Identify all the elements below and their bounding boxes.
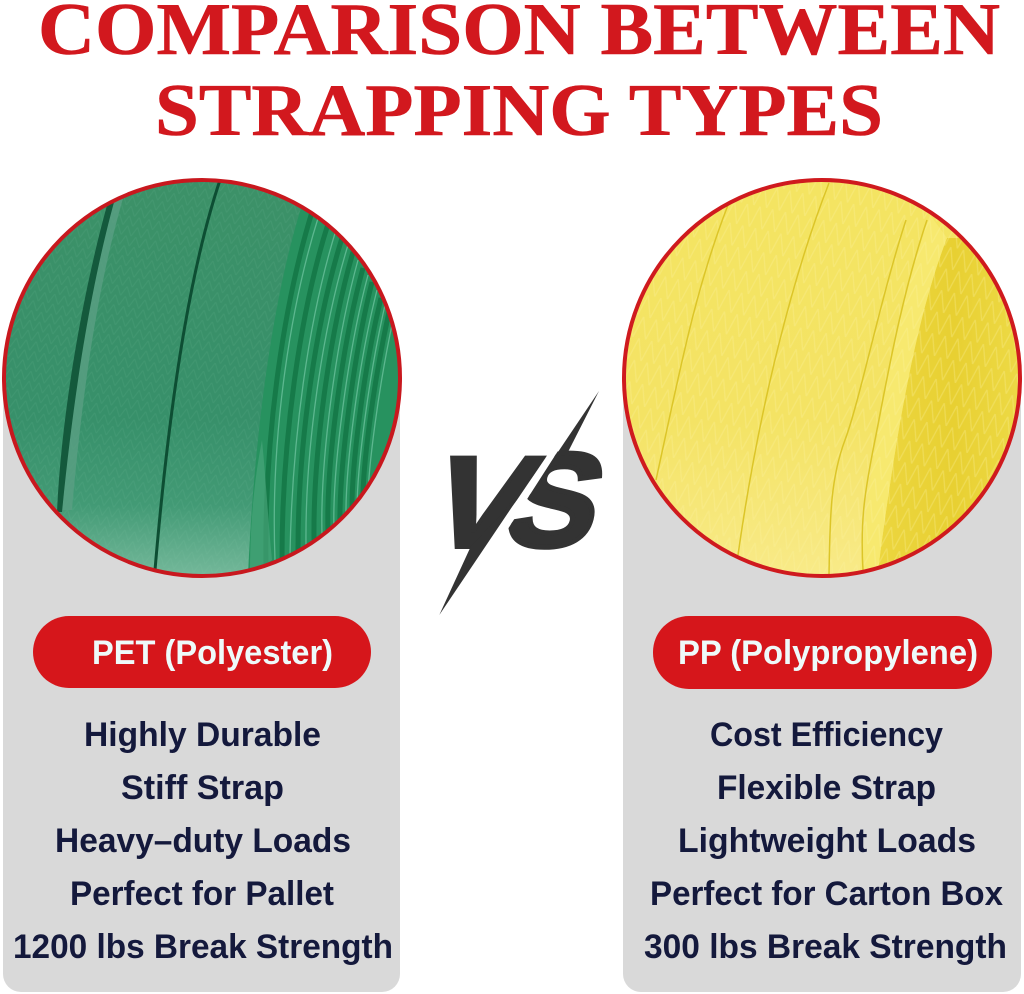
S half with upper spike (508, 391, 602, 550)
feature list: PP: Perfect for Carton Box (650, 875, 1003, 913)
panel background: PET (3, 380, 400, 992)
feature list: PP (644, 716, 1007, 966)
feature list: PET (13, 716, 393, 966)
feature list: PP: Cost Efficiency (710, 716, 943, 754)
label pill: PET (Polyester) (33, 616, 371, 688)
feature list: PET: Stiff Strap (121, 769, 284, 807)
panel: PP (623, 180, 1024, 992)
S half with upper spike: S (494, 426, 620, 575)
feature list: PET: Highly Durable (84, 716, 321, 754)
label pill: PET (Polyester): PET (Polyester) (92, 634, 333, 672)
feature list: PP: 300 lbs Break Strength (644, 928, 1007, 966)
V half with lower spike (439, 456, 547, 615)
label pill: PP (Polypropylene): PP (Polypropylene) (678, 634, 978, 672)
feature list: PP: Flexible Strap (717, 769, 936, 807)
panel background: PP (623, 380, 1021, 992)
photo: green PET strapping (4, 180, 420, 576)
label pill: PP (Polypropylene) (653, 616, 992, 689)
V half with lower spike: V (409, 430, 559, 575)
panel: PET (3, 180, 420, 992)
feature list: PET: Heavy–duty Loads (55, 822, 351, 860)
icon: VS emblem (439, 391, 602, 615)
title (38, 0, 1000, 152)
title: STRAPPING TYPES (155, 70, 883, 152)
feature list: PET: Perfect for Pallet (70, 875, 334, 913)
feature list: PET: 1200 lbs Break Strength (13, 928, 393, 966)
feature list: PP: Lightweight Loads (678, 822, 976, 860)
photo: yellow PP strapping (624, 180, 1024, 576)
